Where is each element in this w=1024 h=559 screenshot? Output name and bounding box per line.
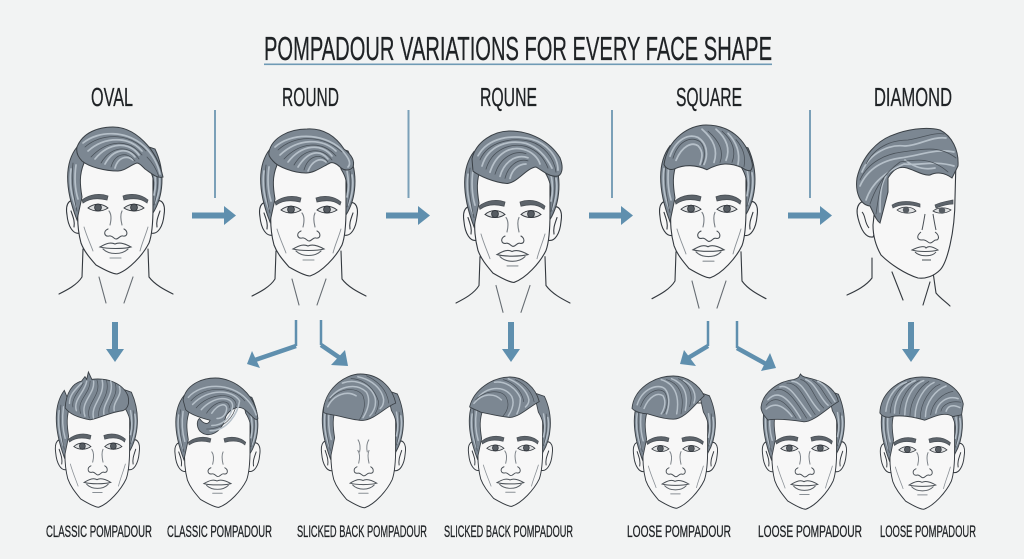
face: round — [252, 129, 366, 305]
variation: classic pompadour 1 — [55, 372, 140, 507]
heading: RQUNE: RQUNE — [480, 82, 537, 112]
arrow: diamond down — [902, 322, 920, 362]
label: slicked back pompadour 2: SLICKED BACK POMPADOUR — [444, 523, 573, 541]
heading: DIAMOND: DIAMOND — [874, 82, 952, 112]
label: loose pompadour 2: LOOSE POMPADOUR — [758, 523, 862, 541]
heading: ROUND: ROUND — [282, 82, 339, 112]
arrow: oval down — [106, 322, 124, 362]
label: classic pompadour 1: CLASSIC POMPADOUR — [46, 523, 152, 541]
variation: slicked back pompadour 1 — [321, 374, 406, 508]
arrow: round to rqune — [386, 110, 430, 225]
arrow: rqune down — [502, 322, 520, 362]
arrow: square to diamond — [788, 110, 832, 225]
arrow: rqune to square — [589, 110, 633, 225]
label: classic pompadour 2: CLASSIC POMPADOUR — [167, 523, 272, 541]
arrow: oval to round — [192, 110, 236, 225]
variation: loose pompadour 2 — [761, 374, 847, 509]
arrow: square branch right — [737, 321, 776, 371]
face: square — [652, 125, 766, 308]
variation: loose pompadour 3 — [880, 377, 965, 509]
label: loose pompadour 1: LOOSE POMPADOUR — [627, 523, 731, 541]
face: oval — [59, 127, 173, 303]
heading: OVAL: OVAL — [91, 82, 133, 112]
face: diamond — [847, 128, 958, 306]
arrow: round branch right — [321, 320, 348, 366]
variation: loose pompadour 1 — [632, 376, 718, 508]
heading: SQUARE: SQUARE — [676, 82, 742, 112]
label: slicked back pompadour 1: SLICKED BACK POMPADOUR — [297, 523, 427, 541]
face: rqune — [456, 131, 570, 312]
variation: slicked back pompadour 2 — [468, 377, 553, 506]
arrow: round branch left — [247, 320, 296, 368]
variation: classic pompadour 2 — [175, 378, 260, 507]
arrow: square branch left — [680, 321, 708, 366]
